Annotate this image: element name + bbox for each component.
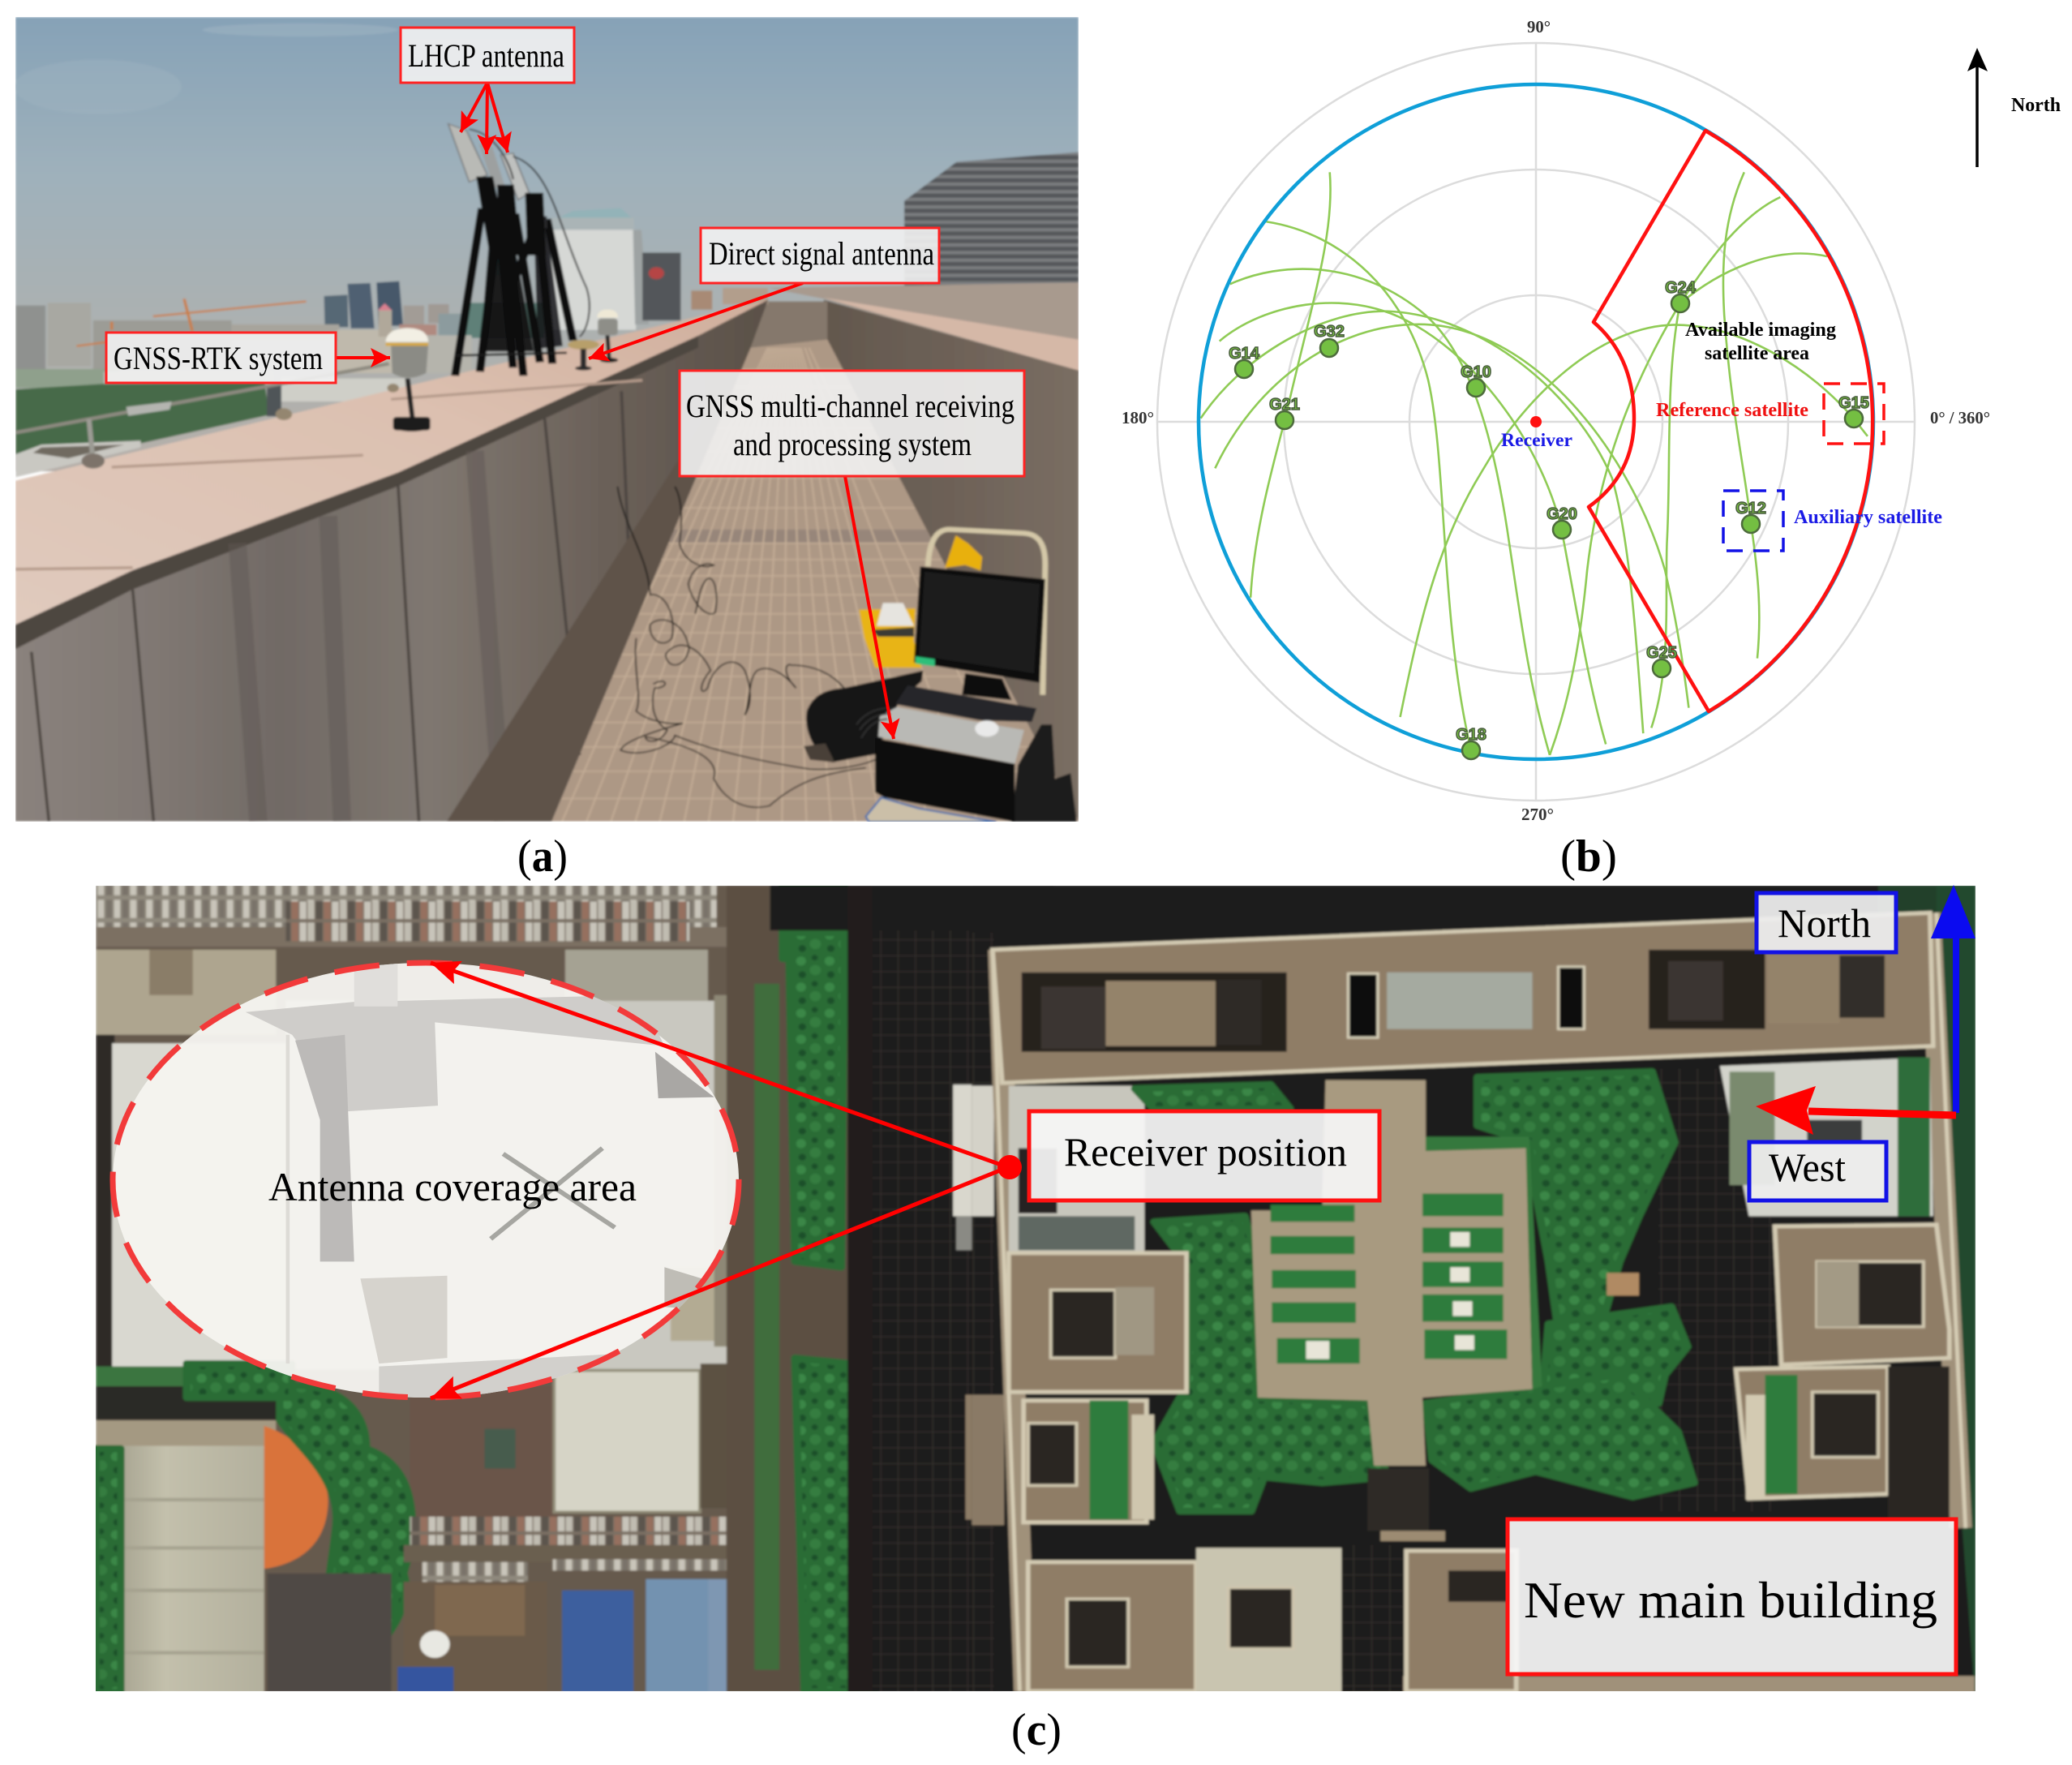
courtyard dark grid	[1658, 1069, 1781, 1511]
available imaging area outline	[1589, 131, 1873, 711]
satellite G14	[1229, 345, 1260, 378]
label: LHCP antenna: LHCP antenna	[408, 37, 564, 74]
label: GNSS-RTK system	[106, 333, 336, 383]
panel c: satellite image of building	[93, 885, 1975, 1693]
skyline buildings and trees	[15, 208, 649, 477]
caption (c): (c)	[1011, 1705, 1062, 1755]
icon: direct signal antenna	[568, 340, 599, 371]
imaging area label: Available imaging	[1685, 320, 1836, 341]
cart handle	[928, 530, 1045, 695]
label: West: West	[1769, 1144, 1846, 1190]
15 degree elevation circle	[1199, 84, 1873, 759]
arrow: receiver system	[845, 476, 894, 739]
caption (a): (a)	[517, 831, 568, 882]
icon: GNSS-RTK unit	[386, 328, 431, 432]
monitor	[962, 673, 1012, 700]
upper west roof	[1009, 1086, 1144, 1256]
label: New main building	[1508, 1519, 1956, 1674]
satellite tracks	[1201, 172, 1868, 755]
road and tree corridor	[727, 885, 857, 1693]
hedge rows	[1271, 1193, 1507, 1363]
label: Direct signal antenna	[701, 228, 939, 283]
imaging area label: satellite area	[1705, 343, 1809, 364]
satellite G14: G14	[1229, 345, 1260, 363]
satellite G25	[1646, 644, 1677, 677]
reference satellite label and box: Reference satellite	[1656, 400, 1808, 421]
label: Receiver position	[1029, 1111, 1379, 1200]
angle labels	[1122, 17, 1990, 824]
receiver point	[997, 1155, 1022, 1179]
polar grid rings and axes	[1157, 43, 1915, 801]
angle labels: 90°	[1527, 17, 1551, 37]
label: West	[1749, 1142, 1886, 1200]
label: New main building: New main building	[1524, 1571, 1937, 1629]
receiver marker	[1501, 416, 1572, 450]
north arrow	[1967, 48, 2061, 167]
angle labels: 180°	[1122, 408, 1154, 427]
north arrow: North	[2011, 95, 2061, 116]
top car park	[96, 885, 717, 928]
satellite G21: G21	[1269, 396, 1300, 414]
railing, GNSS-RTK receivers and direct antenna	[15, 310, 618, 469]
label: GNSS multi-channel receiving and processing system: GNSS multi-channel receiving	[686, 388, 1015, 424]
yellow tool	[945, 535, 982, 570]
blue roofs	[562, 1591, 633, 1693]
satellite G24: G24	[1665, 279, 1697, 297]
satellite G10: G10	[1461, 363, 1491, 381]
auxiliary satellite label and box: Auxiliary satellite	[1794, 507, 1942, 528]
cables	[617, 487, 875, 807]
orange roof	[264, 1426, 328, 1569]
arrows: LHCP antenna	[461, 83, 508, 154]
icon: second RTK unit	[597, 310, 618, 363]
satellite G25: G25	[1646, 644, 1677, 662]
antenna coverage ellipse	[93, 961, 739, 1403]
arrow: west	[1756, 1086, 1956, 1135]
icon: LHCP antenna panels and heads	[448, 124, 590, 337]
keyboard	[895, 685, 1036, 722]
right wall	[821, 300, 1079, 822]
satellite G10	[1461, 363, 1491, 397]
satellite G32: G32	[1314, 323, 1345, 341]
wing blocks	[1775, 1225, 1950, 1365]
green strip	[96, 1367, 289, 1386]
satellite G32	[1314, 323, 1345, 357]
label: GNSS multi-channel receiving and processing system: and processing system	[733, 426, 972, 462]
north wing	[993, 913, 1933, 1083]
satellite G12: G12	[1735, 500, 1766, 517]
angle labels: 0° / 360°	[1930, 408, 1990, 427]
right coping	[768, 282, 1079, 375]
far end wall	[698, 302, 827, 348]
panel a: rooftop photo with labelled equipment	[14, 17, 1079, 822]
arrows from receiver to coverage area	[431, 963, 1008, 1398]
floor tile grid	[562, 347, 1028, 821]
faded roof details	[93, 961, 714, 1403]
perimeter roof band	[999, 913, 1975, 1691]
label: GNSS-RTK system: GNSS-RTK system	[114, 340, 323, 376]
equipment: cables, receiver case, monitor	[617, 487, 1077, 822]
west building	[96, 1035, 114, 1369]
label: Direct signal antenna: Direct signal antenna	[709, 235, 934, 272]
label: North: North	[1778, 900, 1871, 946]
satellites	[1229, 279, 1869, 759]
tripods	[455, 203, 573, 376]
tank	[112, 1445, 264, 1693]
right side clutter	[1012, 724, 1077, 822]
arrow: north	[1931, 885, 1975, 1113]
west block fragments	[953, 1084, 993, 1216]
receiver case	[878, 707, 1024, 764]
dark facade	[851, 927, 1000, 1693]
text: Antenna coverage area: Antenna coverage area	[268, 1164, 637, 1209]
car rows south	[410, 1517, 739, 1545]
label: Receiver position: Receiver position	[1064, 1129, 1347, 1175]
trees	[280, 1385, 412, 1660]
arrow: GNSS-RTK	[336, 356, 390, 359]
label: North	[1757, 893, 1896, 952]
aerial main building	[972, 885, 1975, 1693]
photo c: aerial scene	[96, 885, 1975, 1693]
satellite G15	[1838, 394, 1869, 427]
imaging area label	[1685, 320, 1836, 364]
black bag	[806, 671, 923, 762]
satellite G20: G20	[1546, 505, 1577, 523]
scene: rooftop structure	[14, 24, 1079, 822]
satellite G18: G18	[1456, 726, 1486, 744]
label: GNSS multi-channel receiving and processing system	[680, 371, 1024, 476]
satellite G24	[1665, 279, 1697, 312]
walkway floor	[551, 340, 1079, 822]
satellite G20	[1546, 505, 1577, 539]
satellite G21	[1269, 396, 1300, 429]
aerial west side	[96, 885, 1054, 1693]
right vented building	[904, 152, 1079, 288]
receiver marker: Receiver	[1501, 430, 1572, 450]
angle labels: 270°	[1521, 805, 1554, 824]
trees	[1135, 1084, 1290, 1110]
reference satellite label and box	[1656, 384, 1884, 444]
label: LHCP antenna	[401, 28, 574, 83]
satellite G12	[1735, 500, 1766, 533]
coping top and front wall	[15, 252, 768, 822]
caption (b): (b)	[1560, 831, 1617, 882]
panel b: polar satellite sky plot	[1122, 17, 2061, 824]
yellow case	[859, 608, 922, 668]
central plaza	[1251, 1080, 1533, 1466]
photo a: rooftop scene	[14, 17, 1079, 822]
satellite G18	[1456, 726, 1486, 759]
brown roof and white roof	[410, 1386, 559, 1519]
satellite G15: G15	[1838, 394, 1869, 412]
upper east roof	[1720, 1058, 1933, 1216]
sky	[15, 17, 1079, 471]
arrow: direct signal antenna	[589, 283, 803, 359]
auxiliary satellite label and box	[1723, 491, 1942, 551]
building footprint	[993, 913, 1975, 1691]
